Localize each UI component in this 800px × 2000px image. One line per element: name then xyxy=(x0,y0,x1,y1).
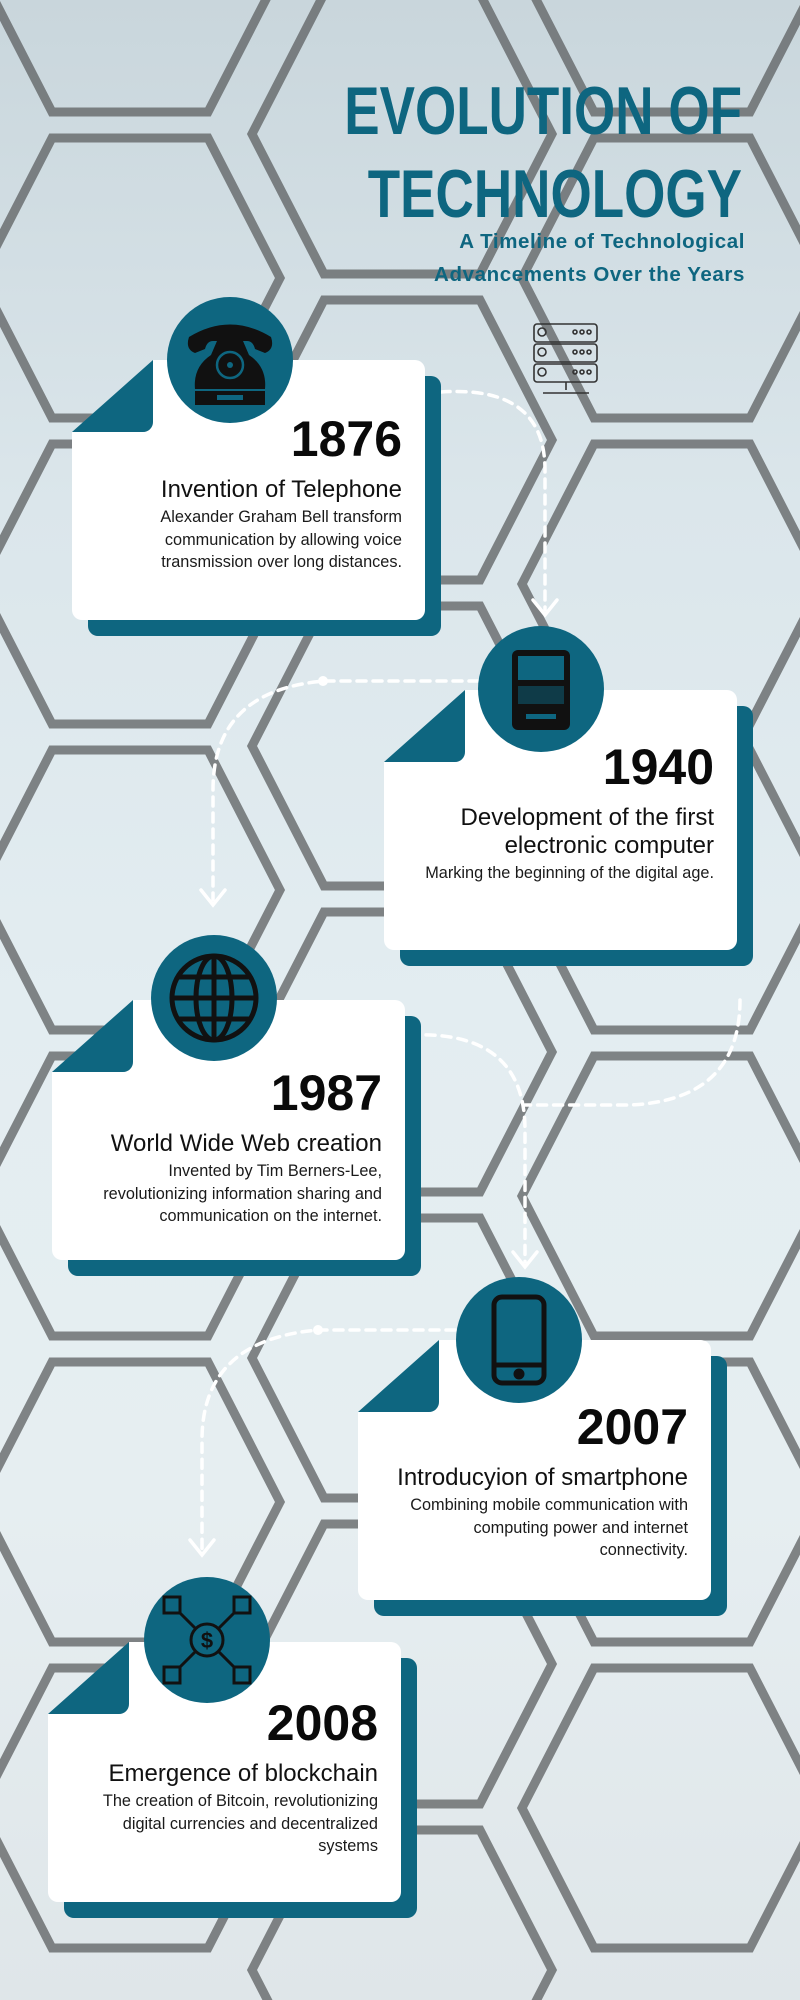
icon: blockchain: $ xyxy=(201,1628,213,1653)
card: 1876 telephone: Alexander Graham Bell transform xyxy=(160,508,402,526)
card: 2007 smartphone: Introducyion of smartphone xyxy=(397,1464,688,1491)
icon: smartphone xyxy=(456,1277,582,1403)
card: 2007 smartphone: Combining mobile communication with xyxy=(410,1496,688,1514)
card: 1876 telephone: 1876 xyxy=(291,411,402,467)
title: EVOLUTION OF xyxy=(344,73,742,149)
title: TECHNOLOGY xyxy=(368,156,742,232)
subtitle xyxy=(434,230,745,286)
card: 2008 blockchain: Emergence of blockchain xyxy=(109,1760,378,1787)
card: 1876 telephone: Invention of Telephone xyxy=(161,476,402,503)
subtitle: A Timeline of Technological xyxy=(459,230,745,253)
card: 1876 telephone: communication by allowing voice xyxy=(165,530,402,548)
icon: computer xyxy=(478,626,604,752)
card: 1987 www: Invented by Tim Berners-Lee, xyxy=(168,1162,382,1180)
card: 1940 computer: 1940 xyxy=(603,739,714,795)
card: 2008 blockchain: systems xyxy=(318,1837,378,1855)
card: 1987 www xyxy=(52,935,421,1276)
subtitle: Advancements Over the Years xyxy=(434,263,745,286)
icon: blockchain xyxy=(144,1577,270,1703)
card: 1987 www: revolutionizing information sharing and xyxy=(103,1184,382,1202)
card: 2008 blockchain: digital currencies and decentralized xyxy=(123,1814,378,1832)
card: 2008 blockchain: The creation of Bitcoin, revolutionizing xyxy=(103,1792,378,1810)
card: 1940 computer: Development of the first xyxy=(461,804,714,831)
card: 2008 blockchain: 2008 xyxy=(267,1695,378,1751)
icon: server xyxy=(533,323,598,394)
card: 2007 smartphone: connectivity. xyxy=(600,1541,688,1559)
card: 1940 computer xyxy=(384,626,753,966)
card: 1876 telephone xyxy=(72,297,441,636)
card: 1987 www: World Wide Web creation xyxy=(111,1130,382,1157)
card: 1940 computer: electronic computer xyxy=(505,832,714,859)
title xyxy=(344,73,742,232)
icon: globe xyxy=(151,935,277,1061)
card: 2007 smartphone: 2007 xyxy=(577,1399,688,1455)
card: 1987 www: communication on the internet. xyxy=(159,1207,382,1225)
card: 2008 blockchain xyxy=(48,1577,417,1918)
card: 2007 smartphone: computing power and internet xyxy=(473,1518,688,1536)
card: 1987 www: 1987 xyxy=(271,1065,382,1121)
card: 2007 smartphone xyxy=(358,1277,727,1616)
card: 1876 telephone: transmission over long distances. xyxy=(161,553,402,571)
icon: telephone xyxy=(167,297,293,423)
card: 1940 computer: Marking the beginning of the digital age. xyxy=(425,864,714,882)
